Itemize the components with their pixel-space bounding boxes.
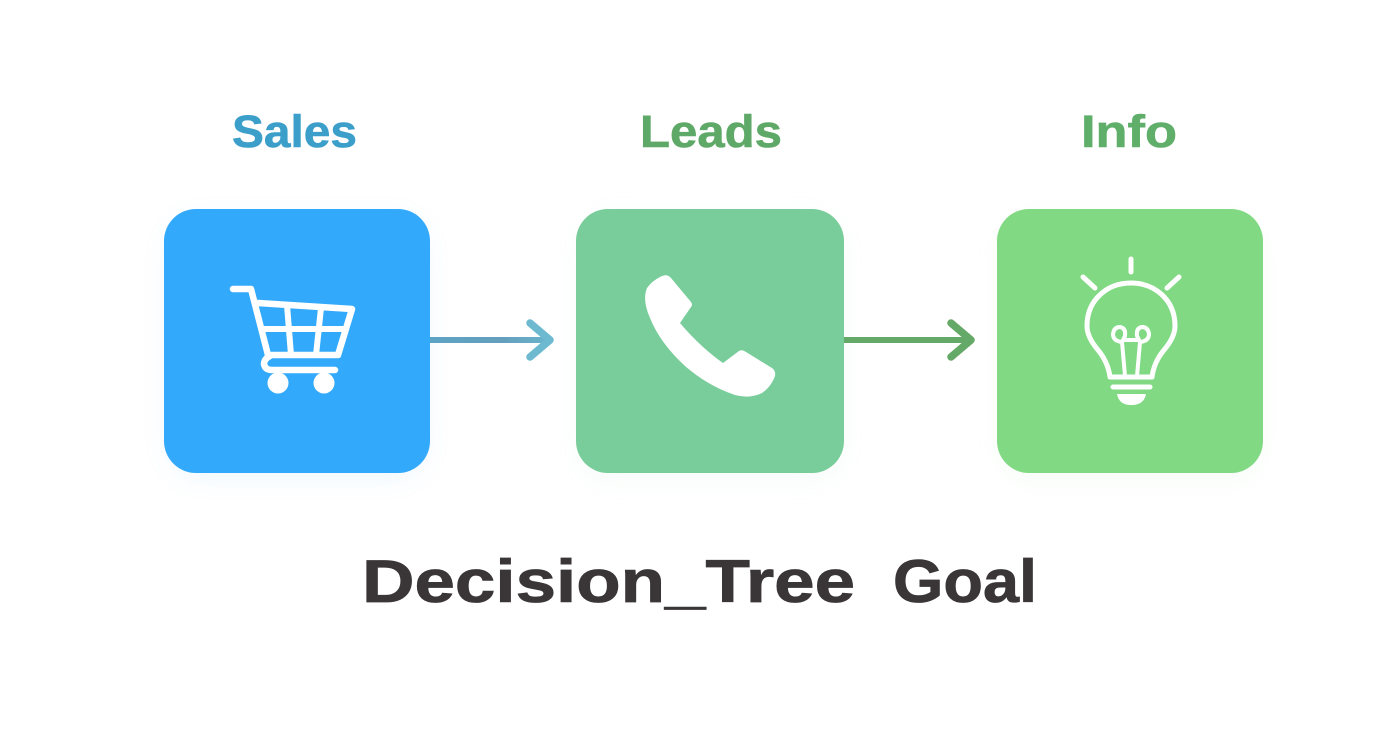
arrow: leads to info [844,323,971,357]
title: first word: Decision_Tree [362,548,855,615]
panel: sales [164,209,430,473]
arrow: sales to leads [430,323,550,357]
heading: Leads: Leads [640,106,782,157]
title [362,548,1037,615]
icon: telephone handset [645,275,775,397]
panel: info [997,209,1263,473]
heading: Sales: Sales [232,106,357,157]
title: second word: Goal [893,548,1037,615]
icon: light bulb [1083,259,1179,405]
heading: Info: Info [1081,106,1177,157]
panel: leads [576,209,844,473]
icon: shopping cart [233,289,352,394]
